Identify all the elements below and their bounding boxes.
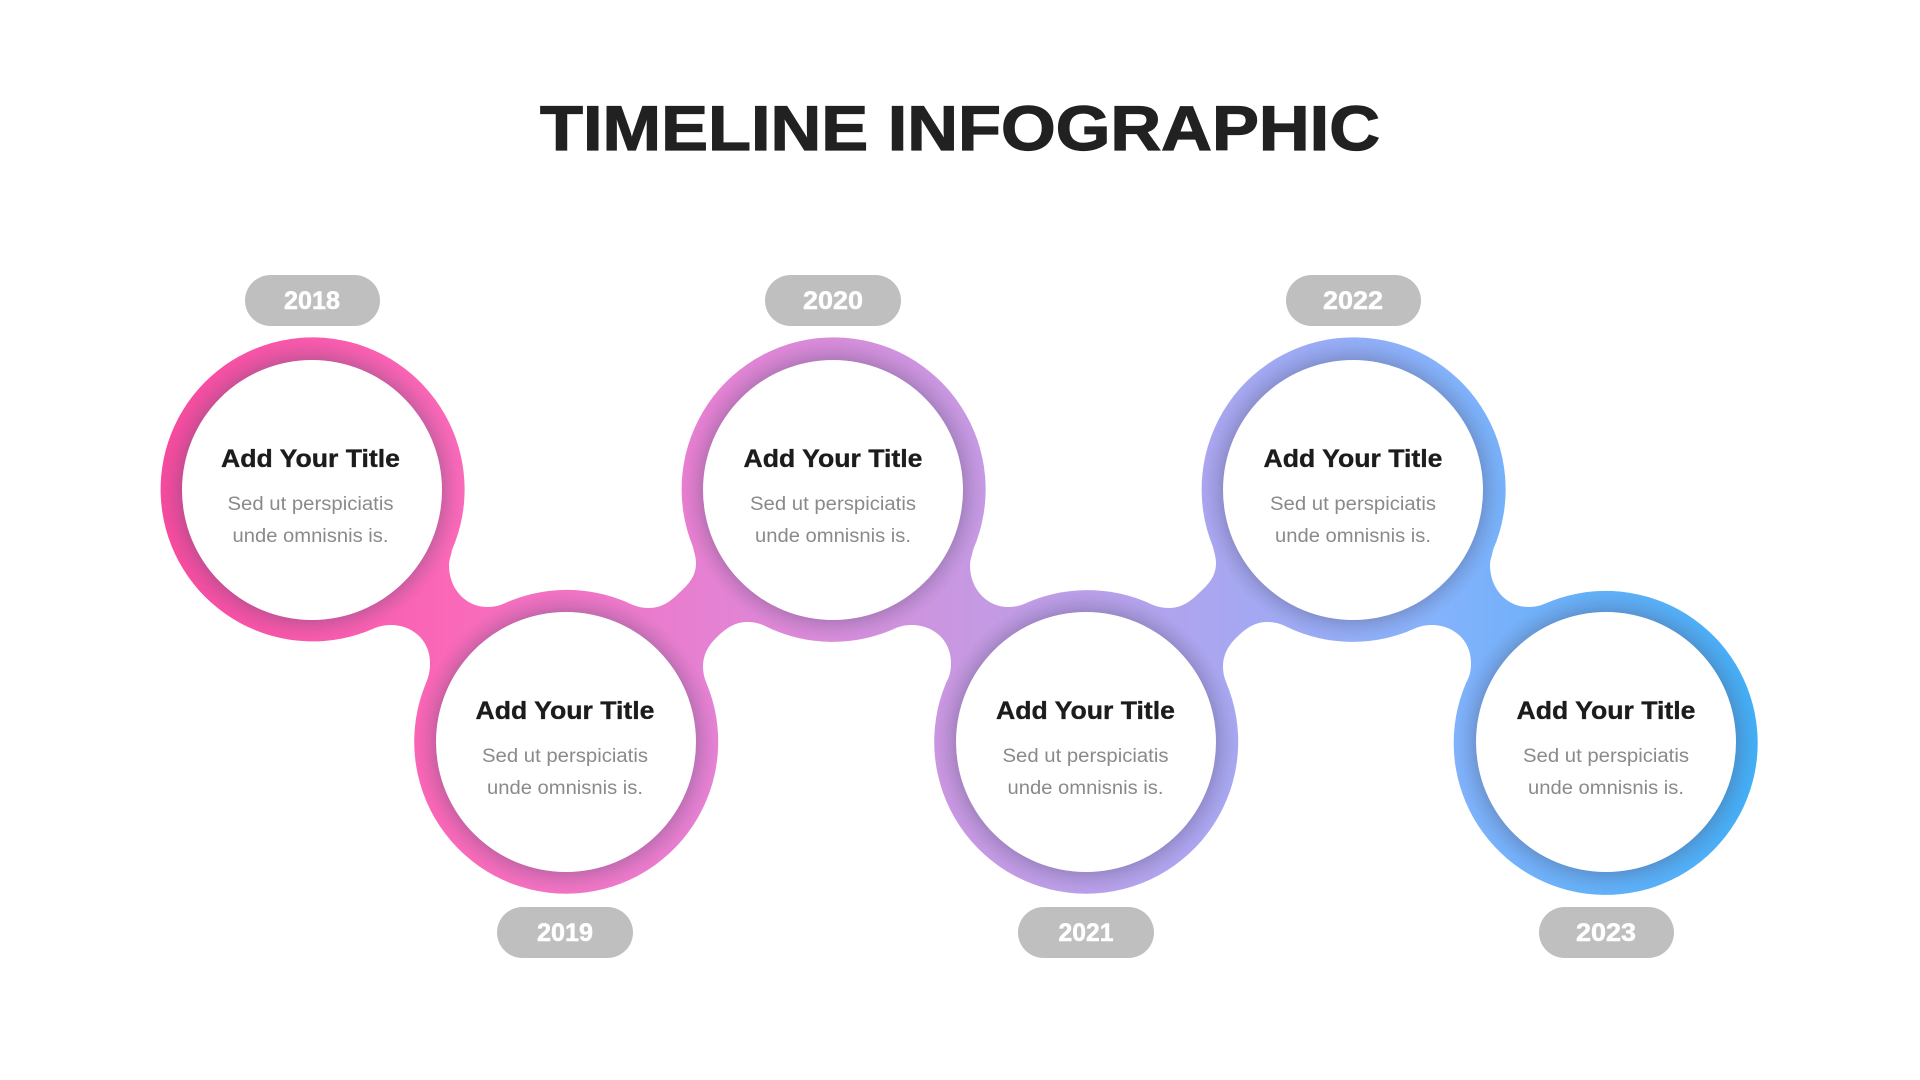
white circle xyxy=(956,612,1216,872)
title: TIMELINE INFOGRAPHIC xyxy=(540,94,1380,164)
step heading: Add Your Title xyxy=(221,445,400,473)
step heading: Add Your Title xyxy=(744,445,923,473)
step description: unde omnisnis is. xyxy=(232,526,388,547)
step heading: Add Your Title xyxy=(996,697,1175,725)
year badge 2022 xyxy=(1286,275,1421,326)
step description xyxy=(1270,494,1436,547)
step description: unde omnisnis is. xyxy=(487,778,643,799)
step description xyxy=(1523,746,1689,799)
year badge 2018: 2018 xyxy=(284,287,340,315)
step 2023 xyxy=(1476,612,1736,958)
step description: Sed ut perspiciatis xyxy=(1523,746,1689,767)
year badge 2018 xyxy=(245,275,380,326)
year badge 2021 xyxy=(1018,907,1154,958)
year badge 2019 xyxy=(497,907,633,958)
white circle xyxy=(436,612,696,872)
year badge 2020: 2020 xyxy=(803,287,863,315)
step description: unde omnisnis is. xyxy=(1275,526,1431,547)
year badge 2020 xyxy=(765,275,901,326)
white circle xyxy=(703,360,963,620)
white circle xyxy=(1476,612,1736,872)
step description: unde omnisnis is. xyxy=(1528,778,1684,799)
step description xyxy=(482,746,648,799)
gradient ribbon connecting the circles xyxy=(157,335,1761,897)
step description xyxy=(228,494,394,547)
step 2021 xyxy=(956,612,1216,958)
step description: Sed ut perspiciatis xyxy=(228,494,394,515)
step description: Sed ut perspiciatis xyxy=(1270,494,1436,515)
year badge 2021: 2021 xyxy=(1058,919,1114,947)
step 2019 xyxy=(436,612,696,958)
year badge 2022: 2022 xyxy=(1323,287,1383,315)
step description: unde omnisnis is. xyxy=(755,526,911,547)
step heading: Add Your Title xyxy=(476,697,655,725)
step heading: Add Your Title xyxy=(1516,697,1696,725)
step 2020 xyxy=(703,275,963,620)
step description xyxy=(750,494,916,547)
step description: Sed ut perspiciatis xyxy=(750,494,916,515)
step 2018 xyxy=(182,275,442,620)
year badge 2019: 2019 xyxy=(537,919,593,947)
step description xyxy=(1002,746,1168,799)
year badge 2023 xyxy=(1539,907,1674,958)
step description: Sed ut perspiciatis xyxy=(1002,746,1168,767)
step description: Sed ut perspiciatis xyxy=(482,746,648,767)
step heading: Add Your Title xyxy=(1264,445,1443,473)
step description: unde omnisnis is. xyxy=(1008,778,1164,799)
white circle xyxy=(1223,360,1483,620)
step 2022 xyxy=(1223,275,1483,620)
year badge 2023: 2023 xyxy=(1576,919,1636,947)
white circle xyxy=(182,360,442,620)
